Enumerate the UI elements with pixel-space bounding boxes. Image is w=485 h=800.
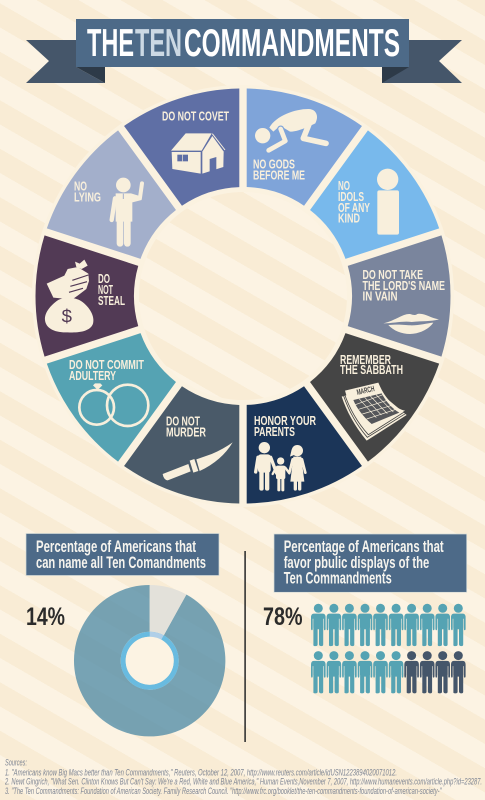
label: DO NOT (166, 414, 200, 428)
donut chart (74, 585, 225, 736)
label: PARENTS (254, 424, 295, 439)
label: REMEMBER (340, 352, 391, 367)
heading box: can name all Ten Comandments (36, 554, 206, 572)
left ribbon fold (76, 67, 105, 83)
segment: do not steal (9, 211, 156, 357)
title text: TEN (135, 22, 182, 65)
label: NO GODS (253, 156, 295, 172)
icon: calendar (342, 383, 407, 441)
label: BEFORE ME (253, 168, 305, 182)
icon: kneeling figure (255, 109, 326, 150)
label: ADULTERY (69, 368, 116, 383)
label: OF ANY (338, 200, 370, 215)
pictogram: people (311, 604, 466, 693)
icon: wedding rings (79, 383, 148, 426)
icon: house (171, 133, 225, 174)
right ribbon tail (382, 40, 462, 83)
label: DO (98, 271, 110, 286)
icon: hand with money bag (45, 260, 93, 332)
panel: name all ten commandments (26, 534, 225, 736)
heading box (274, 534, 467, 592)
segment: do not commit adultery (25, 299, 187, 462)
label: KIND (338, 210, 360, 226)
segment: no idols (299, 130, 461, 293)
stat: 14%: 14% (26, 603, 65, 631)
left ribbon tail (26, 40, 105, 83)
heading box (26, 534, 219, 576)
label: DO NOT COMMIT (69, 357, 144, 372)
commandment wheel (9, 58, 477, 534)
icon: hand with money bag: $ (62, 305, 73, 326)
label: IN VAIN (362, 288, 398, 304)
segment: honor your parents (200, 371, 362, 534)
heading box: Ten Commandments (284, 570, 392, 588)
label: NO (338, 178, 350, 193)
icon: calendar: MARCH (356, 384, 375, 397)
label: DO NOT COVET (162, 108, 229, 124)
label: MURDER (166, 424, 206, 440)
label: NO (74, 178, 87, 194)
panel: favor public displays (263, 534, 467, 693)
segment: lord's name in vain (330, 235, 477, 381)
icon: knife (163, 442, 233, 480)
segment: no gods before me (247, 89, 362, 206)
segment: do not covet (124, 58, 286, 221)
banner body (76, 19, 409, 67)
heading box: Percentage of Americans that (36, 538, 196, 556)
icon: idol (377, 169, 399, 235)
title banner (26, 19, 462, 83)
label: THE SABBATH (340, 362, 403, 377)
label: LYING (74, 190, 101, 204)
right ribbon fold (382, 67, 409, 83)
label: STEAL (98, 293, 125, 308)
label: THE LORD'S NAME (362, 278, 445, 293)
segment: no lying (47, 119, 194, 265)
segment: remember the sabbath (292, 327, 439, 473)
title text: THE (87, 22, 134, 65)
label: DO NOT TAKE (362, 267, 423, 282)
icon: person raising hand (112, 178, 142, 247)
label: IDOLS (338, 189, 364, 204)
sources: Sources: (5, 758, 27, 768)
segment: do not murder (124, 386, 239, 503)
label: NOT (98, 282, 113, 297)
stat: 78%: 78% (263, 603, 302, 631)
icon: family (256, 442, 305, 491)
label: HONOR YOUR (254, 413, 316, 428)
icon: lips (383, 314, 439, 334)
